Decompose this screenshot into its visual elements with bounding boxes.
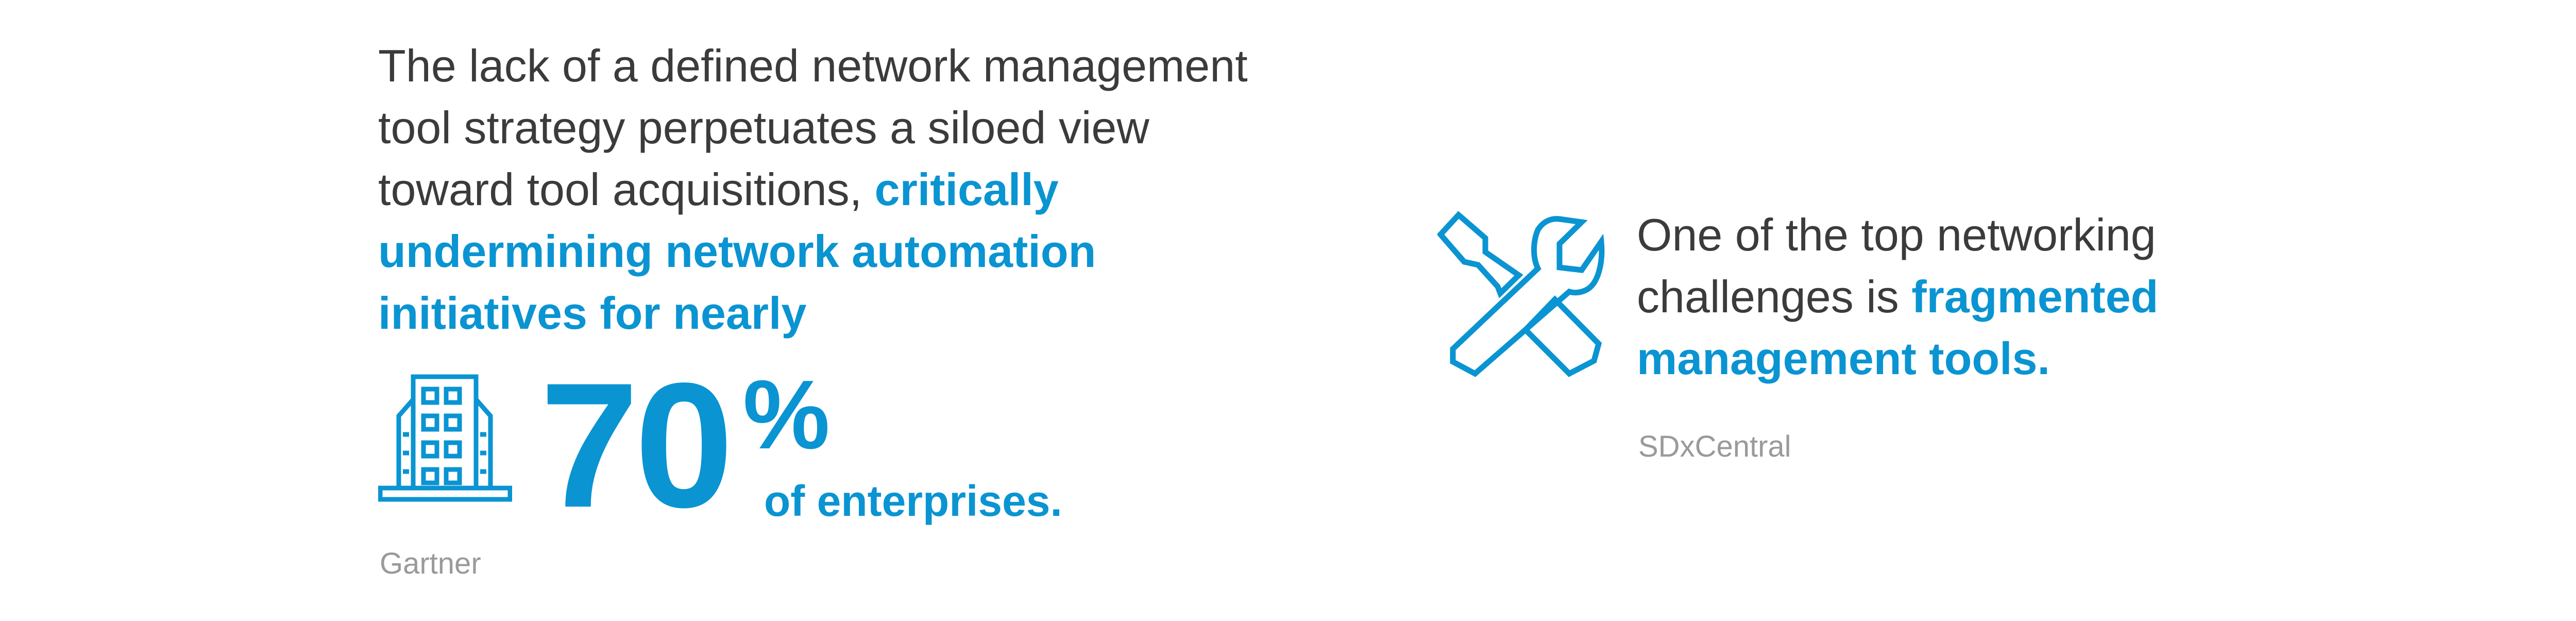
text block: statement: management tools. [1637, 333, 2050, 384]
text block: statement: challenges is fragmented [1637, 271, 2158, 322]
icon: building [378, 374, 512, 502]
percent sign: % [743, 360, 830, 469]
text block: statement [1637, 209, 2158, 384]
text block: statement: One of the top networking [1637, 209, 2156, 260]
source: SDxCentral: SDxCentral [1638, 430, 1791, 463]
number: 70%: 70 [540, 346, 730, 545]
text block: main statement: initiatives for nearly [378, 288, 806, 339]
text block: main statement: tool strategy perpetuates a siloed view [378, 102, 1149, 153]
text block: main statement: undermining network automation [378, 226, 1096, 277]
text block: main statement: The lack of a defined network management [378, 40, 1248, 91]
text: of enterprises: of enterprises. [764, 477, 1062, 525]
text block: main statement [378, 40, 1248, 339]
panel: left stat [378, 40, 1248, 580]
panel: right stat [1437, 209, 2158, 463]
text block: main statement: toward tool acquisitions, critically [378, 164, 1059, 215]
source: Gartner: Gartner [380, 547, 481, 580]
icon: tools [1437, 211, 1604, 377]
